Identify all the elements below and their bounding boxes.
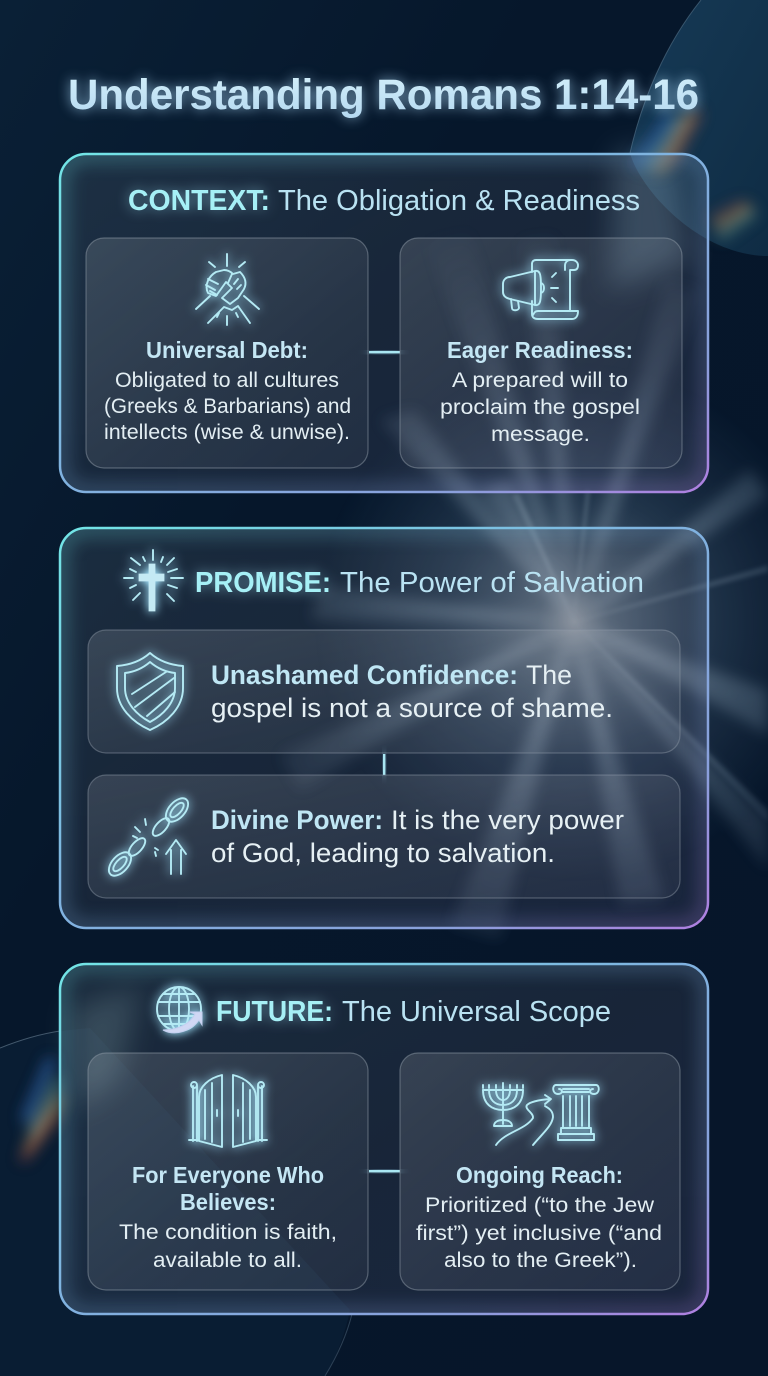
heading: promise: The Power of Salvation (340, 567, 644, 599)
text: universal debt: Universal Debt: (146, 337, 308, 363)
icon: globe with arrow (157, 987, 202, 1033)
text: for everyone who believes: The condition is faith, (119, 1220, 337, 1244)
text: eager readiness: proclaim the gospel (440, 395, 640, 419)
soft beam through the future panel (70, 985, 140, 1110)
icon: radiant cross (124, 550, 183, 611)
card: eager readiness (400, 238, 682, 468)
text: divine power (211, 805, 624, 868)
text: universal debt (104, 337, 351, 444)
text: eager readiness: message. (491, 422, 590, 446)
icon: clasped hands (196, 254, 259, 325)
icon: broken chain and arrow (105, 794, 192, 880)
title: Understanding Romans 1:14-16 (68, 71, 699, 119)
icon: open gates (189, 1075, 267, 1147)
icon: shield (117, 653, 183, 730)
panel: promise (60, 528, 708, 928)
card: for everyone who believes (88, 1053, 368, 1290)
text: ongoing reach: Prioritized (“to the Jew (425, 1193, 654, 1217)
text: divine power: Divine Power: (211, 805, 383, 835)
connector: context cards (369, 351, 400, 353)
text: divine power: of God, leading to salvation. (211, 838, 555, 868)
text: for everyone who believes: available to all. (153, 1248, 302, 1272)
text: unashamed confidence: Unashamed Confidence: (211, 660, 518, 690)
panel: context (60, 154, 708, 492)
card: ongoing reach (400, 1053, 680, 1290)
text: universal debt: intellects (wise & unwise). (104, 420, 350, 444)
light burst (314, 362, 768, 882)
glass shape: top right (630, 0, 768, 256)
text: universal debt: Obligated to all cultures (115, 368, 339, 392)
text: unashamed confidence: The (526, 660, 572, 690)
soft beam through the context panel (610, 150, 690, 290)
heading: context: CONTEXT: (128, 185, 270, 217)
text: ongoing reach (416, 1162, 662, 1272)
heading: future: FUTURE: (216, 996, 333, 1028)
card: unashamed confidence (88, 630, 680, 753)
text: ongoing reach: first”) yet inclusive (“and (416, 1221, 662, 1245)
text: ongoing reach: Ongoing Reach: (456, 1162, 623, 1188)
text: eager readiness (440, 337, 640, 446)
text: divine power: It is the very power (391, 805, 624, 835)
text: eager readiness: A prepared will to (452, 368, 628, 392)
heading: context: The Obligation & Readiness (278, 185, 640, 217)
icon: menorah, road and column (483, 1083, 599, 1145)
text: for everyone who believes (119, 1162, 337, 1272)
card: divine power (88, 775, 680, 898)
card: universal debt (86, 238, 368, 468)
text: unashamed confidence: gospel is not a source of shame. (211, 693, 613, 723)
connector: future cards (369, 1170, 400, 1172)
heading: promise: PROMISE: (195, 567, 331, 599)
text: for everyone who believes: For Everyone Who (132, 1162, 324, 1188)
connector: promise cards (383, 754, 385, 775)
text: eager readiness: Eager Readiness: (447, 337, 633, 363)
text: for everyone who believes: Believes: (180, 1189, 276, 1215)
rainbow flares (24, 114, 752, 1158)
text: unashamed confidence (211, 660, 613, 723)
icon: megaphone and scroll (503, 260, 578, 319)
text: ongoing reach: also to the Greek”). (444, 1248, 637, 1272)
heading: future: The Universal Scope (342, 996, 611, 1028)
heading: promise (195, 567, 644, 599)
glass sphere: bottom left (0, 1028, 350, 1376)
panel: future (60, 964, 708, 1314)
heading: future (216, 996, 611, 1028)
text: universal debt: (Greeks & Barbarians) and (104, 394, 351, 418)
